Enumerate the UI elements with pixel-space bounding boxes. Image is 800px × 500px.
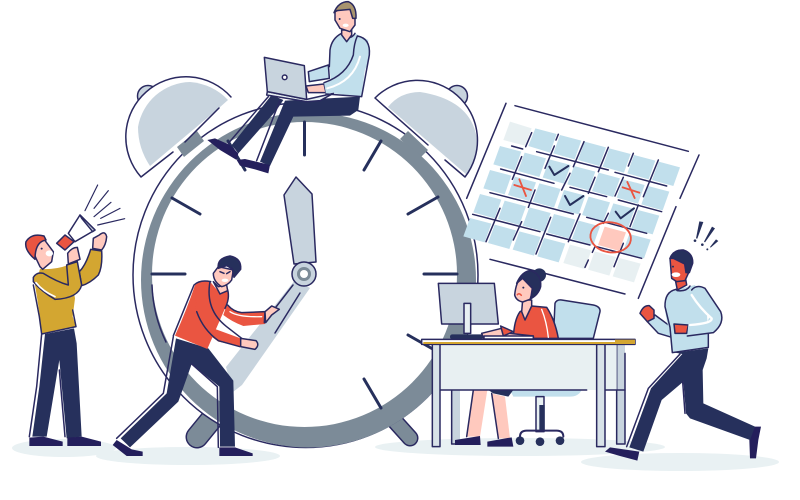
legs [117,337,235,447]
far arm [223,305,265,326]
calendar frame and grid lines [467,103,699,298]
neck [675,275,687,290]
shoes [113,440,253,456]
chair seat and base [510,390,582,446]
clock hand: long hand pointing up [284,177,316,264]
torso [173,281,228,349]
megaphone [57,215,95,250]
left bell [126,77,231,177]
near arm [195,282,242,347]
icon: clock feet [197,415,410,438]
megaphone sound lines [85,185,125,225]
icon: bell connectors [177,131,428,158]
raised hand [93,233,107,250]
head [670,250,693,282]
woman neck [522,300,532,320]
far leg [228,95,283,153]
shoes [207,138,270,173]
alarm clock [126,77,478,447]
back shoe [749,427,761,458]
hand on megaphone [68,247,80,264]
calendar check marks [549,166,634,218]
clock ring [141,113,476,448]
calendar [463,103,699,298]
chair back [553,300,600,338]
head [213,256,241,287]
person: man on clock with laptop [207,2,369,173]
shoes [29,437,101,446]
exclamation marks [694,221,718,250]
near leg [257,97,360,166]
woman torso [513,306,558,338]
monitor [438,283,498,339]
clock hour ticks [152,122,457,408]
desk front legs [432,345,605,447]
desk with woman [422,268,635,447]
clock inner partial outline [152,285,166,342]
front hand [674,324,688,333]
person: running man [605,221,761,461]
desk top [422,339,635,344]
papers and arms [482,326,533,339]
calendar cells [463,122,680,282]
clock hand hub [292,262,316,286]
raised arm [79,249,102,286]
torso [665,285,708,353]
right bell [375,80,477,177]
head [334,2,356,32]
woman shoes [455,436,513,447]
desk rear legs [452,345,625,444]
clock outer outline [133,102,478,448]
hand on keyboard [306,84,326,93]
front shoe [605,447,639,461]
torso [33,265,76,334]
arm holding megaphone [33,262,82,299]
torso [329,33,368,97]
woman head [515,268,546,302]
neck [213,282,228,294]
woman legs [467,390,513,438]
person: man pushing clock hand [113,256,279,456]
neck [342,30,352,42]
calendar crosses [514,179,639,198]
desk body [440,345,625,390]
person: man with megaphone [26,185,125,446]
far arm [308,65,329,82]
back arm [647,315,672,337]
front arm [687,287,722,336]
icon: bell knobs [138,86,468,106]
calendar deadline circle [588,220,633,255]
fist [640,306,654,322]
near arm [324,36,369,97]
legs [627,348,755,452]
head [26,235,53,269]
laptop [264,57,333,102]
hands [241,306,279,349]
legs [29,328,82,438]
floor shadows [12,438,779,471]
clock hand: hand pointing down-left [226,280,310,392]
